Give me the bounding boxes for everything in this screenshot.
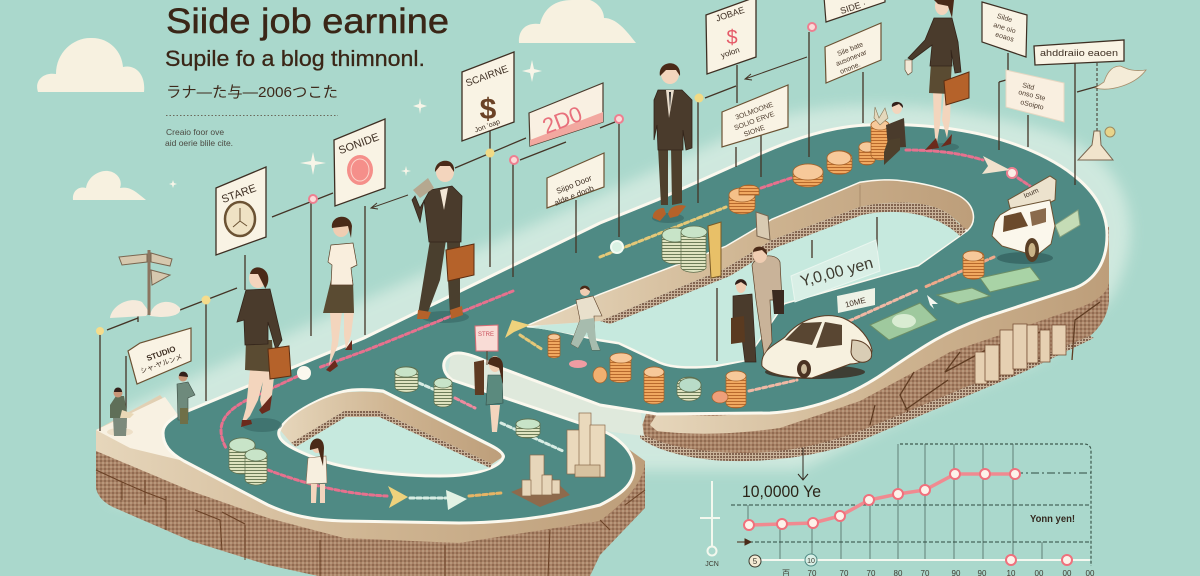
pink short (455, 398, 475, 408)
title: Siide job earnine (166, 2, 449, 41)
person: pair by yen sign (731, 247, 784, 362)
track surface (163, 125, 1107, 523)
cream top corner (96, 397, 184, 461)
cash stacks (229, 226, 707, 485)
trail past car (749, 290, 918, 391)
platform wall: lower loop (96, 395, 645, 576)
yen sign panel: Y,0,00 yen (799, 255, 875, 290)
route trail (221, 150, 1030, 498)
axis badges: 5 (753, 557, 758, 566)
yen sign panel (791, 240, 880, 302)
sign: SCAIRNE dollar: Jon ʻoap (474, 118, 501, 134)
title block (165, 2, 449, 148)
sign: ahddraiio eaoen: ahddraiio eaoen (1040, 48, 1118, 58)
white dot (297, 366, 311, 380)
hole one wall (281, 392, 502, 473)
person: with pink sign (474, 325, 503, 432)
sign: STARE with clock: STARE (220, 182, 258, 206)
signpost with mounds (110, 250, 180, 318)
chart points (744, 469, 1020, 530)
pink trail one (221, 291, 513, 448)
sign: SONIDE (334, 119, 385, 206)
sign: Siipo Door: Siipo Door (555, 173, 593, 196)
yellow tag sign (708, 222, 721, 278)
sign: Solmo: SOLIO ERVE (733, 111, 776, 132)
sign: SCAIRNE dollar (462, 52, 514, 141)
cloud: lower left (73, 171, 146, 200)
platform halo (110, 105, 1130, 560)
cream band (96, 395, 645, 543)
chart callout: Yonn yen! (1030, 514, 1075, 525)
coin stacks (548, 120, 984, 408)
hole two stipple (600, 202, 966, 324)
bill by truck (980, 267, 1040, 292)
sign: SCAIRNE dollar: SCAIRNE (464, 64, 510, 89)
sign: STUDIO arrow: STUDIO (145, 344, 177, 363)
grey tag sign (756, 212, 770, 240)
cloud: upper left (37, 38, 144, 92)
truck wheel (1025, 238, 1039, 262)
teal shadows under upper figures (242, 143, 959, 432)
arrow: cream right (982, 156, 1010, 174)
clock icon (225, 202, 255, 236)
stone blocks (96, 470, 645, 576)
wall stone (96, 430, 645, 576)
left axis marker (700, 481, 720, 556)
sign: Silde right: ane oio (992, 22, 1017, 35)
sign: Solmo: SIONE (743, 124, 766, 139)
green dot (611, 241, 623, 253)
bills (870, 210, 1080, 340)
pink trail top (906, 150, 983, 160)
pale dashes (419, 383, 563, 451)
hole two wall (528, 181, 973, 366)
sign: Sile bate (825, 23, 881, 83)
chart value label: 10,0000 Ye (742, 482, 821, 501)
pink trail upper (761, 178, 791, 188)
axis badges (749, 554, 1072, 567)
sign: Sitd (1006, 70, 1064, 122)
hole one inner wall (281, 392, 502, 464)
shadow stipple (640, 336, 1094, 461)
subtitle: Supile fo a blog thimnonl. (165, 46, 425, 71)
platform wall: upper track (640, 200, 1109, 461)
wall city silhouette (975, 324, 1066, 384)
sign: Silde right (982, 2, 1027, 57)
line chart (700, 444, 1095, 576)
truck label: Ioum (1023, 187, 1040, 200)
arrow: leader to man (371, 195, 408, 209)
hole two inner wall (528, 181, 973, 326)
sign: SONIDE: SONIDE (337, 131, 381, 157)
arrow: yellow upper (505, 320, 530, 338)
sign: Sitd: Sitd (1022, 82, 1035, 92)
person: woman in white top (323, 217, 357, 372)
sign: 10ME (837, 288, 875, 313)
mini city on tray (511, 455, 570, 507)
sign: STUDIO arrow: シャ-ヤルンメ (140, 354, 183, 375)
arrow: yellow (388, 486, 408, 508)
description: Creaio foor ove (166, 127, 224, 137)
yellow dashes (469, 493, 501, 496)
person: walking small (571, 286, 602, 350)
sign: SIDE top (824, 0, 885, 22)
sign connector lines (100, 32, 1120, 431)
sign: 2DO pink (529, 83, 603, 146)
truck (992, 176, 1056, 264)
person: girl in white dress (306, 438, 327, 503)
sign: JOBAE yen: JOBAE (714, 5, 746, 23)
x axis labels (782, 569, 1095, 576)
pink trail right (1018, 178, 1030, 186)
bill under truck (1055, 210, 1080, 237)
sign: Siipo Door (547, 153, 604, 208)
dotted divider text (166, 114, 338, 116)
person: main walking woman (237, 267, 291, 427)
person: with pink sign: STRE (478, 332, 494, 338)
sign: 10ME: 10ME (844, 296, 867, 309)
sign: Sitd: onso Ste (1018, 89, 1046, 103)
sign: Sile bate: Sile bate (836, 41, 864, 58)
pink blob (569, 360, 587, 368)
wall segment line (859, 185, 861, 207)
arrow: white (446, 490, 467, 510)
sign: JOBAE yen: $ (726, 27, 738, 49)
car (762, 316, 872, 379)
chart guide lines (748, 444, 1042, 560)
wall cream band (650, 235, 1109, 434)
yellow trail upper (600, 207, 726, 257)
sign: Siipo Door: alde e doob (553, 183, 596, 208)
person: standing man (653, 63, 692, 221)
axis badges: 10 (807, 558, 815, 565)
sign: STUDIO arrow (128, 328, 191, 384)
bill upper (937, 288, 990, 304)
sparkles (169, 60, 542, 188)
sign: Silde right: eoaos (994, 31, 1015, 44)
truck window side (1030, 208, 1046, 226)
wall stone (640, 200, 1109, 454)
chart line (749, 474, 1015, 525)
connector nodes (96, 23, 816, 335)
hole one wall shadow (291, 411, 492, 468)
truck shadow (997, 252, 1053, 264)
stone cracks (870, 302, 1100, 425)
person: man with paper (412, 161, 474, 319)
arrow: white cursor (927, 295, 938, 309)
sign: Sile bate: onone. (839, 61, 862, 76)
orange trail right (925, 257, 994, 287)
hole two floor (530, 202, 966, 366)
truck box (1008, 176, 1056, 214)
arrow: down to chart (798, 448, 808, 480)
sign: 2DO pink: 2D0 (539, 101, 586, 139)
arrow: leader to upper sign (745, 57, 807, 80)
pink circle icon (347, 155, 373, 185)
cloud: top centre (519, 0, 636, 43)
left axis label: JCN (705, 561, 719, 568)
sign: Solmo (722, 85, 788, 147)
sign: JOBAE yen (706, 0, 756, 74)
truck cab (992, 200, 1055, 256)
bill near car (870, 303, 937, 340)
sign: STARE with clock (216, 167, 266, 255)
person: seated man with coins (874, 102, 906, 165)
date line: ラナ—た与—2006つこた (166, 84, 338, 101)
sign: Sitd: oSoipto (1020, 99, 1044, 112)
description line two: aid oerie blile cite. (165, 138, 233, 148)
route markers (297, 156, 1017, 510)
small arrow mark (737, 539, 751, 545)
person: seated on stool (107, 388, 134, 436)
hole one floor (296, 417, 490, 473)
x axis (760, 559, 1090, 561)
pink trail two (268, 470, 387, 496)
tent icon (1078, 127, 1115, 160)
boat hat icon (1095, 63, 1146, 133)
truck window (1003, 212, 1028, 232)
white dashes (410, 496, 446, 500)
pink dot on right (1007, 168, 1017, 178)
dollar icon: $ (480, 93, 497, 126)
sign: ahddraiio eaoen (1034, 40, 1124, 65)
sign: Silde right: Silde (996, 13, 1013, 24)
chart frame (900, 444, 1091, 566)
tall city (567, 413, 605, 477)
sign: JOBAE yen: yolon (720, 45, 741, 60)
sign: Solmo: 3OLMOONE (735, 101, 775, 122)
trail by arrow (520, 335, 543, 350)
person: small with hands out (177, 372, 195, 424)
person: top woman (905, 0, 969, 150)
sign: Sile bate: ausonevar (835, 49, 869, 68)
strip gap under middle track (446, 350, 644, 436)
